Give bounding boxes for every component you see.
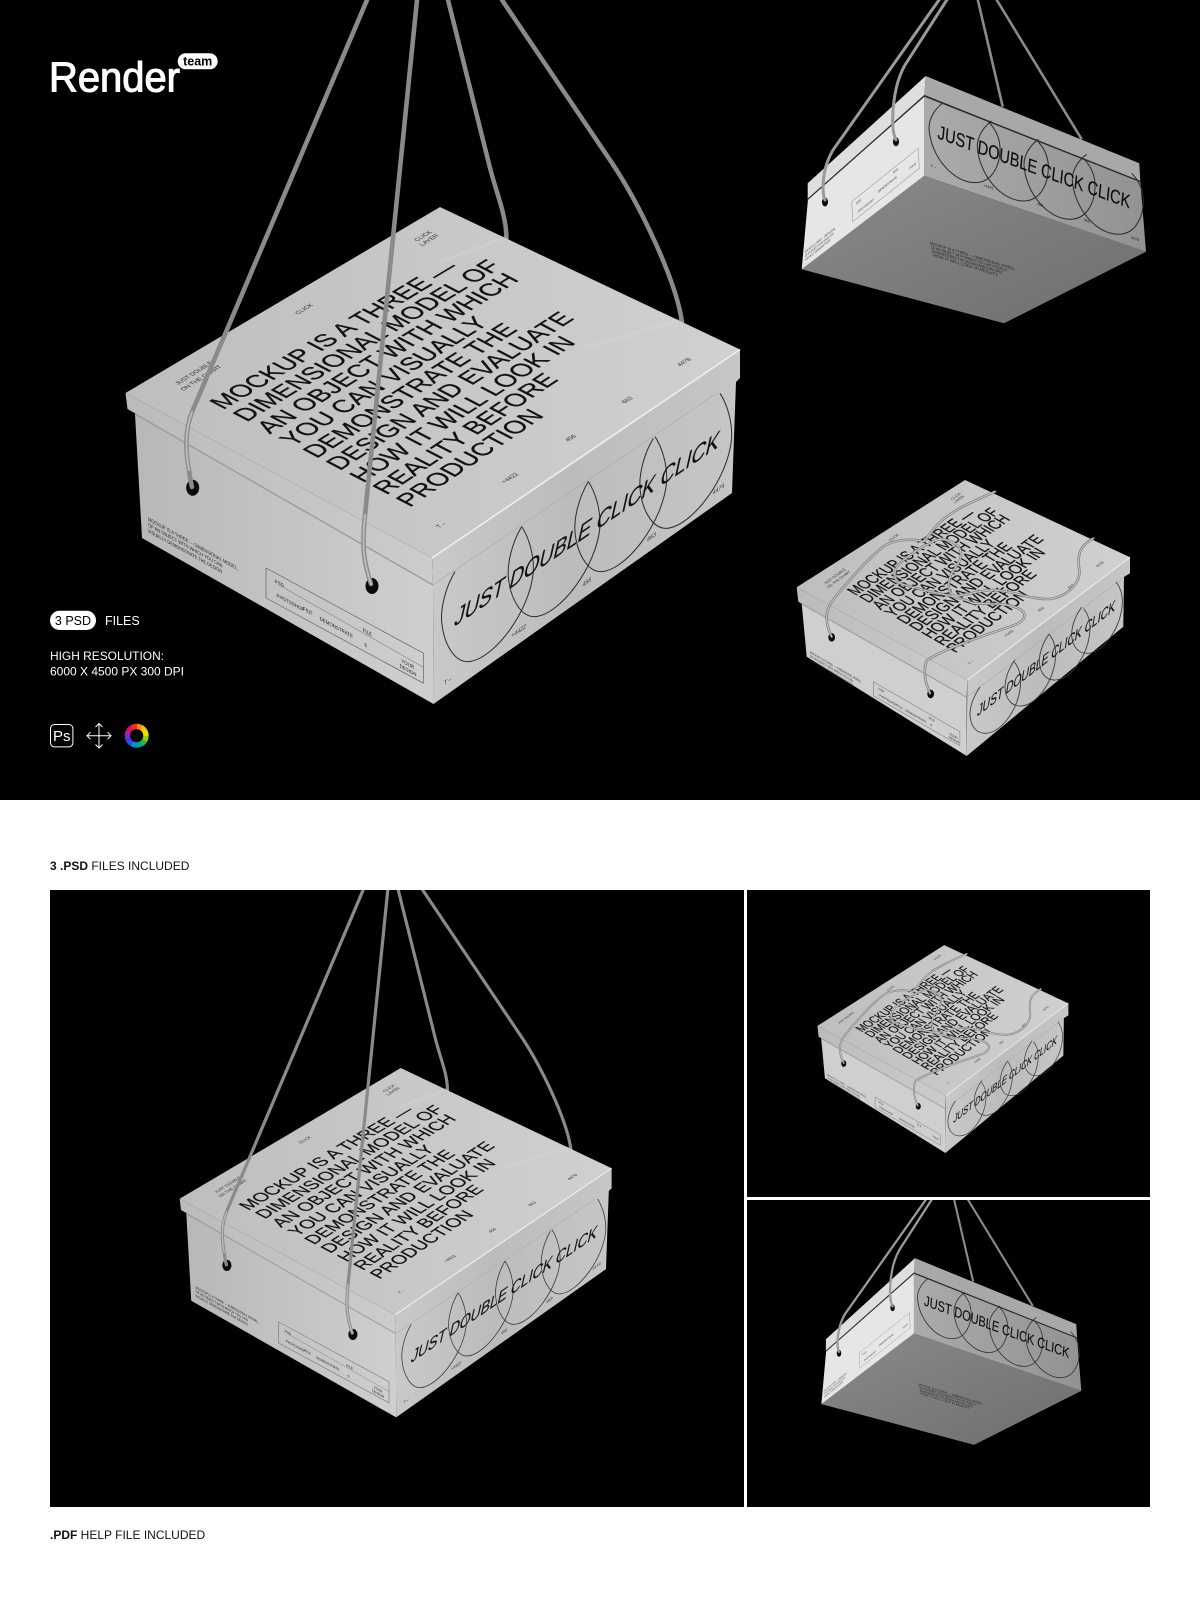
top face small labels: JUST DOUBLE	[823, 568, 848, 585]
resolution text	[50, 649, 184, 678]
top face small labels: JUST DOUBLE	[213, 1176, 243, 1194]
top face small labels: +4422	[442, 1254, 458, 1263]
left face paragraph: OF AN OBJECT WITH WHICH YOU	[824, 1375, 846, 1396]
left face label table: DESIGN	[372, 1389, 385, 1399]
left face label table	[875, 1097, 940, 1145]
top face small labels: 663	[527, 1200, 538, 1207]
badge: 3 PSD files: 3 PSD	[55, 614, 91, 628]
icon: move arrows	[87, 724, 111, 748]
logo: Render team: team	[183, 54, 212, 68]
side face small numbers: 456	[582, 576, 592, 589]
top face small labels: LAYER	[385, 1086, 401, 1096]
side face small numbers: T –	[443, 675, 452, 688]
right body face	[914, 1273, 1081, 1391]
top face small labels	[837, 954, 1050, 1085]
top face small labels: T –	[397, 1288, 407, 1294]
side face small numbers: 4474	[712, 482, 725, 497]
left body face	[821, 1274, 914, 1404]
side face small numbers: 4474	[592, 1261, 601, 1271]
left face small paragraph: OF AN OBJECT WITH WHICH YOU CAN	[148, 523, 223, 570]
left face small paragraph: VISUALLY DEMONSTRATE THE DESIGN	[195, 1294, 248, 1327]
resolution text: 6000 X 4500 PX 300 DPI	[50, 664, 184, 678]
box right side face	[967, 557, 1130, 756]
top face small labels: CLICK	[297, 1135, 313, 1144]
right lid face	[914, 1258, 1077, 1337]
top face small labels: JUST DOUBLE	[174, 360, 216, 386]
back ropes	[396, 880, 571, 1149]
icon: Photoshop	[50, 724, 73, 747]
top face headline text: MOCKUP IS A THREE —	[203, 258, 466, 413]
bottom face paragraph: OF AN OBJECT WITH WHICH YOU CAN VISUALLY	[931, 245, 1008, 273]
top face headline text: REALITY BEFORE	[366, 370, 565, 498]
box lid top face	[817, 945, 1068, 1096]
top face small labels: CLICK	[294, 302, 316, 316]
top face small labels: CLICK	[885, 985, 896, 992]
top face small labels: T –	[435, 521, 449, 529]
top face small labels: 456	[1037, 607, 1045, 612]
left face small paragraph: OF AN OBJECT WITH WHICH YOU CAN	[195, 1290, 248, 1323]
left face label table: FILE	[304, 1348, 311, 1356]
left face label table: PSD	[285, 1329, 291, 1337]
side face small numbers: 663	[1084, 218, 1090, 224]
top face small labels: +4422	[500, 472, 521, 485]
left face label table: PSD	[862, 1350, 866, 1357]
top face small labels: 4478	[566, 1173, 579, 1181]
left face paragraph: MOCKUP IS A THREE — DIMENSIONAL	[805, 226, 836, 254]
top face headline text: YOU CAN VISUALLY	[283, 1142, 439, 1238]
bottom face paragraph: OF AN OBJECT WITH WHICH YOU CAN VISUALLY	[919, 1385, 977, 1407]
left face label table: FILE	[363, 627, 373, 639]
top face headline text: AN OBJECT WITH WHICH	[868, 512, 1015, 613]
top face headline text: HOW IT WILL LOOK IN	[918, 546, 1050, 641]
left face paragraph: OF AN OBJECT WITH WHICH YOU CAN	[810, 654, 854, 683]
top face headline text: DESIGN AND EVALUATE	[906, 532, 1048, 634]
top face small labels: +4422	[972, 1057, 982, 1064]
top face small labels: 4478	[1095, 561, 1105, 568]
lid gap lines	[826, 1273, 1077, 1351]
right body face	[924, 96, 1146, 252]
top face small labels: 663	[1067, 584, 1075, 589]
top face headline text: PRODUCTION	[390, 406, 550, 510]
top face headline text: HOW IT WILL LOOK IN	[332, 1156, 500, 1264]
left face label table: PHOTOSHOP	[286, 1339, 306, 1354]
left lid face	[826, 1258, 915, 1351]
top face small labels: 4478	[676, 357, 694, 368]
box right side face	[945, 1003, 1068, 1153]
left face label table	[859, 1313, 910, 1368]
top face headline text: YOU CAN VISUALLY	[273, 313, 495, 449]
panel: bottom-view box	[747, 1197, 1150, 1507]
box left lid face	[797, 587, 967, 697]
box left lid face	[180, 1199, 396, 1334]
top face headline text: DIMENSIONAL MODEL OF	[863, 965, 974, 1040]
left face label table: YOUR	[932, 1135, 939, 1142]
top face headline text: PRODUCTION	[943, 589, 1034, 655]
top face small labels: 4478	[1041, 1006, 1050, 1011]
top face small labels: T –	[945, 1080, 952, 1085]
top face small labels: T –	[967, 659, 976, 665]
left face label table: DEMONSTRATE	[320, 616, 353, 640]
left face label table: 6	[348, 1374, 349, 1379]
box right side face	[432, 350, 740, 704]
front ropes with eyelets	[186, 0, 417, 594]
left face label table: PHOTOSHOP	[879, 693, 897, 707]
top face headline text: DEMONSTRATE THE	[893, 540, 1017, 627]
lid gap lines	[808, 96, 1140, 199]
hero background panel	[0, 0, 1200, 800]
left face label table: YOUR	[401, 658, 414, 671]
bottom face	[821, 1333, 1081, 1445]
left face label table: FILE	[929, 716, 935, 723]
bottom face paragraph: HOW IT WILL LOOK IN REALITY	[921, 1391, 970, 1410]
top face small labels: CLICK	[413, 229, 435, 243]
top face headline text	[234, 1103, 500, 1281]
lid edge lines	[821, 1003, 1068, 1109]
left face label table: FILE	[893, 167, 898, 175]
back ropes	[448, 0, 682, 322]
top face headline text	[203, 256, 582, 510]
left face paragraph: VISUALLY DEMONSTRATE THE DESIGN	[810, 658, 854, 687]
top face headline text: DEMONSTRATE THE	[297, 320, 524, 462]
top face small labels	[213, 1084, 579, 1294]
box right side face	[395, 1168, 612, 1417]
side face small numbers: 663	[647, 531, 657, 544]
side face small numbers	[443, 482, 725, 688]
side graphic: leaf circles and JUST DOUBLE CLICK CLICK: JUST DOUBLE CLICK CLICK	[409, 1221, 600, 1368]
left face paragraph: MOCKUP IS A THREE — DIMENSIONAL	[824, 1371, 847, 1393]
top face headline text: PRODUCTION	[927, 1027, 996, 1077]
left face label table	[852, 148, 919, 222]
top face headline text	[843, 506, 1050, 655]
left face label table: FILE	[917, 1123, 922, 1129]
top face headline text: PRODUCTION	[365, 1207, 478, 1281]
left body face	[802, 96, 924, 269]
top face headline text: AN OBJECT WITH WHICH	[872, 970, 982, 1045]
loose ropes and eyelets	[840, 954, 1041, 1110]
top face small labels: 663	[620, 396, 636, 405]
top face headline text: DIMENSIONAL MODEL OF	[250, 1103, 448, 1221]
box left lid face	[126, 393, 433, 585]
top face small labels: 456	[487, 1227, 498, 1233]
left face paragraph: MOCKUP IS A THREE — DIMENSIONAL MODEL,	[810, 650, 862, 684]
side face small numbers: +4422	[983, 183, 993, 191]
top face headline text: DESIGN AND EVALUATE	[900, 985, 1007, 1061]
top face small labels: CLICK	[888, 533, 901, 542]
left face label table: PHOTOSHOP	[864, 1350, 876, 1363]
side graphic: leaf circles and JUST DOUBLE CLICK CLICK: JUST DOUBLE CLICK CLICK	[937, 121, 1132, 213]
left face paragraph: OF AN OBJECT WITH WHICH YOU	[805, 231, 834, 258]
top face headline text: YOU CAN VISUALLY	[881, 537, 1000, 620]
top face headline text: AN OBJECT WITH WHICH	[267, 1112, 461, 1230]
hero box: hanging box, bottom view	[802, 0, 1146, 323]
box left body face	[821, 1039, 945, 1153]
left face paragraph: VISUALLY DEMONSTRATE	[824, 1379, 844, 1399]
left face label table: DEMONSTRATE	[899, 1117, 915, 1130]
top face small labels: CLICK	[932, 954, 942, 961]
back ropes	[977, 0, 1082, 139]
panel: large top-view box	[50, 880, 744, 1507]
top face headline text: REALITY BEFORE	[918, 1011, 1002, 1072]
bottom face paragraph: MOCKUP IS A THREE — DIMENSIONAL MODEL	[930, 241, 1015, 271]
box lid top face	[126, 207, 740, 558]
left face label table: DESIGN	[949, 735, 960, 745]
top face headline text: MOCKUP IS A THREE —	[843, 507, 981, 598]
top face small labels: 663	[1020, 1023, 1028, 1028]
side face small numbers	[931, 164, 1139, 242]
left face label table	[873, 682, 960, 746]
front ropes with eyelets	[837, 1197, 933, 1357]
top face headline text: HOW IT WILL LOOK IN	[909, 995, 1008, 1067]
box left lid face	[817, 1026, 946, 1109]
hero box: box with loose ropes lying on top	[797, 480, 1130, 756]
left face label table: 6	[930, 723, 932, 728]
left face label table: YOUR	[374, 1385, 383, 1394]
top face small labels: ON THE CHART	[217, 1178, 249, 1198]
left face label table: YOUR	[950, 732, 958, 741]
right lid face	[924, 76, 1140, 181]
bottom face paragraph: HOW IT WILL LOOK IN REALITY	[933, 253, 999, 277]
box left body face	[802, 604, 967, 756]
box: hanging box, top view	[180, 880, 612, 1417]
logo: Render team: Render	[49, 54, 180, 100]
side graphic: leaf circles and JUST DOUBLE CLICK CLICK: JUST DOUBLE CLICK CLICK	[952, 1033, 1058, 1127]
box lid top face	[180, 1068, 612, 1315]
top face small labels: CLICK	[381, 1084, 396, 1093]
side graphic: leaf circles and JUST DOUBLE CLICK CLICK	[929, 103, 1143, 234]
left face label table: PSD	[878, 687, 885, 694]
box: hanging box, bottom view	[821, 1197, 1081, 1445]
bottom face paragraph: MOCKUP IS A THREE — DIMENSIONAL MODEL	[918, 1382, 983, 1406]
icon: color ring	[124, 723, 149, 748]
top face small labels: ON THE CHART	[826, 570, 853, 589]
top face small labels: LAYER	[418, 233, 441, 247]
left face small paragraph: MOCKUP IS A THREE — DIMENSIONAL MODEL,	[148, 517, 239, 573]
top face small labels: +4422	[1003, 629, 1015, 638]
left face label table: PSD	[275, 579, 284, 590]
side face small numbers	[403, 1261, 601, 1405]
top face headline text: DIMENSIONAL MODEL OF	[227, 256, 508, 425]
left face label table: PHOTOSHOP	[277, 593, 305, 614]
footer note: PDF help file: .PDF HELP FILE INCLUDED	[50, 1528, 205, 1542]
left face label table	[266, 568, 423, 683]
top face small labels: CLICK	[950, 492, 963, 501]
top face headline text: YOU CAN VISUALLY	[881, 988, 971, 1050]
top face small labels: LAYER	[953, 495, 966, 504]
left face label table: DEMONSTRATE	[878, 175, 897, 194]
front ropes with eyelets	[822, 0, 950, 206]
left face paragraph: MOCKUP IS A THREE — DIMENSIONAL MODEL,	[827, 1073, 867, 1099]
lid shading lines	[186, 1089, 612, 1334]
back ropes	[954, 1197, 1033, 1306]
badge: 3 PSD files	[50, 611, 140, 630]
side graphic: leaf circles and JUST DOUBLE CLICK CLICK: JUST DOUBLE CLICK CLICK	[452, 425, 723, 633]
front ropes with eyelets	[222, 880, 389, 1340]
panel: loose rope box	[747, 890, 1150, 1197]
side face small numbers: 456	[501, 1327, 508, 1336]
badge: 3 PSD files: FILES	[105, 614, 140, 628]
top face small labels: ON THE CHART	[179, 364, 224, 392]
left face label table: DESIGN	[400, 663, 417, 679]
box left body face	[186, 1214, 396, 1417]
hero box: hanging box, top view	[126, 0, 740, 704]
left face label table: FILE	[303, 606, 313, 617]
top face headline text: DESIGN AND EVALUATE	[316, 1139, 499, 1256]
bottom face paragraph: DEMONSTRATE THE DESIGN AND EVALUATE	[932, 249, 1003, 275]
top face headline text	[853, 965, 1008, 1077]
side face small numbers: 663	[546, 1295, 553, 1305]
lid edge lines	[802, 557, 1130, 697]
side graphic: leaf circles and JUST DOUBLE CLICK CLICK: JUST DOUBLE CLICK CLICK	[976, 597, 1117, 721]
box lid top face	[797, 480, 1130, 680]
top face small labels: JUST DOUBLE	[837, 1011, 856, 1024]
section heading: PSD files included: 3 .PSD FILES INCLUDED	[50, 859, 190, 873]
left lid face	[808, 76, 926, 199]
box: loose ropes on top	[817, 945, 1068, 1153]
left face paragraph: OF AN OBJECT WITH WHICH YOU CAN	[827, 1076, 860, 1098]
top face headline text: MOCKUP IS A THREE —	[853, 966, 956, 1034]
left face label table: PHOTOSHOP	[858, 197, 874, 214]
left face label table: FILE	[346, 1363, 353, 1371]
side graphic: leaf circles and JUST DOUBLE CLICK CLICK: JUST DOUBLE CLICK CLICK	[923, 1292, 1070, 1361]
left face label table: DEMONSTRATE	[879, 1333, 894, 1348]
top face small labels: 456	[564, 434, 579, 443]
side face small numbers: 4478	[1131, 236, 1139, 242]
left face label table: PHOTOSHOP	[880, 1106, 893, 1117]
top face headline text: DEMONSTRATE THE	[891, 991, 983, 1056]
left face small paragraph: VISUALLY DEMONSTRATE THE DESIGN	[148, 528, 223, 576]
top face small labels: 456	[998, 1040, 1005, 1045]
side face small numbers: +4422	[451, 1360, 462, 1372]
top face small labels	[823, 492, 1105, 665]
top face headline text: DIMENSIONAL MODEL OF	[856, 506, 1004, 605]
side face small numbers: +4422	[511, 623, 527, 640]
left face label table	[278, 1322, 389, 1403]
left face label table: YOUR	[909, 161, 917, 171]
side face small numbers: 456	[1037, 202, 1043, 208]
top face headline text: DEMONSTRATE THE	[299, 1147, 460, 1247]
left face label table: FILE	[897, 703, 903, 711]
top face headline text: REALITY BEFORE	[349, 1182, 488, 1273]
bottom face	[802, 176, 1146, 323]
icon: Photoshop: Ps	[53, 728, 70, 745]
top face headline text: MOCKUP IS A THREE —	[234, 1103, 419, 1213]
left face label table: PSD	[879, 1101, 884, 1107]
top face headline text: AN OBJECT WITH WHICH	[250, 270, 526, 437]
left face label table: PSD	[856, 197, 862, 206]
lid shading lines	[135, 237, 740, 585]
top face small labels	[174, 229, 694, 529]
left face paragraph: VISUALLY DEMONSTRATE	[805, 237, 831, 262]
top face headline text: DESIGN AND EVALUATE	[320, 308, 580, 474]
side face small numbers: T –	[931, 164, 937, 170]
side face small numbers: T –	[403, 1397, 409, 1405]
box left body face	[135, 414, 434, 704]
left face label table: YOUR	[902, 1323, 908, 1330]
left face label table: DEMONSTRATE	[905, 708, 926, 724]
loose ropes and eyelets	[827, 492, 1093, 698]
left face label table: 6	[364, 642, 367, 650]
top face headline text: HOW IT WILL LOOK IN	[343, 332, 582, 486]
left face small paragraph: MOCKUP IS A THREE — DIMENSIONAL MODEL,	[195, 1286, 259, 1325]
resolution text: HIGH RESOLUTION:	[50, 649, 164, 663]
left face label table: DEMONSTRATE	[316, 1355, 340, 1372]
bottom face paragraph: DEMONSTRATE THE DESIGN AND EVALUATE	[920, 1388, 973, 1409]
left face paragraph: VISUALLY DEMONSTRATE THE DESIGN	[827, 1079, 860, 1101]
side graphic: leaf circles and JUST DOUBLE CLICK CLICK	[917, 1278, 1079, 1378]
top face headline text: REALITY BEFORE	[930, 567, 1041, 648]
